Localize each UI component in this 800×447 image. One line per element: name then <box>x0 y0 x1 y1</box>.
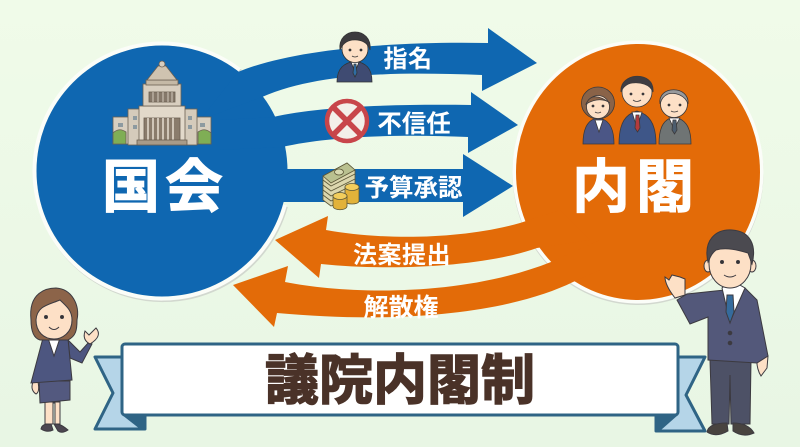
icon: three ministers <box>582 76 691 144</box>
character: man presenter <box>665 230 768 435</box>
panel: 国会 circle <box>34 44 288 300</box>
character: woman presenter <box>31 288 98 432</box>
heading: 内閣: 内閣 <box>572 155 700 220</box>
arrow: 不信任 <box>220 92 518 153</box>
banner: title ribbon <box>95 344 705 431</box>
label: 予算承認: 予算承認 <box>364 174 463 202</box>
heading: 国会: 国会 <box>102 155 228 220</box>
label: 法案提出: 法案提出 <box>353 242 451 269</box>
label: 指名: 指名 <box>384 46 432 73</box>
title: 議院内閣制 <box>265 351 535 411</box>
arrow: 指名 <box>200 28 537 120</box>
icon: prohibition cross <box>327 101 367 141</box>
ribbon tail: left <box>95 357 145 429</box>
arrow: 予算承認 <box>220 154 513 217</box>
arrow: 解散権 <box>233 240 600 327</box>
ribbon fold: left <box>122 415 145 429</box>
label: 不信任: 不信任 <box>377 110 451 138</box>
icon: money stack and coins <box>323 163 359 210</box>
banner plate <box>122 344 678 415</box>
ribbon tail: right <box>656 357 705 431</box>
icon: national diet building <box>113 61 211 145</box>
panel: 内閣 circle <box>512 40 764 305</box>
arrow: 法案提出 <box>275 210 590 278</box>
icon: nominee <box>337 32 372 82</box>
ribbon fold: right <box>656 415 678 430</box>
label: 解散権: 解散権 <box>363 294 439 322</box>
